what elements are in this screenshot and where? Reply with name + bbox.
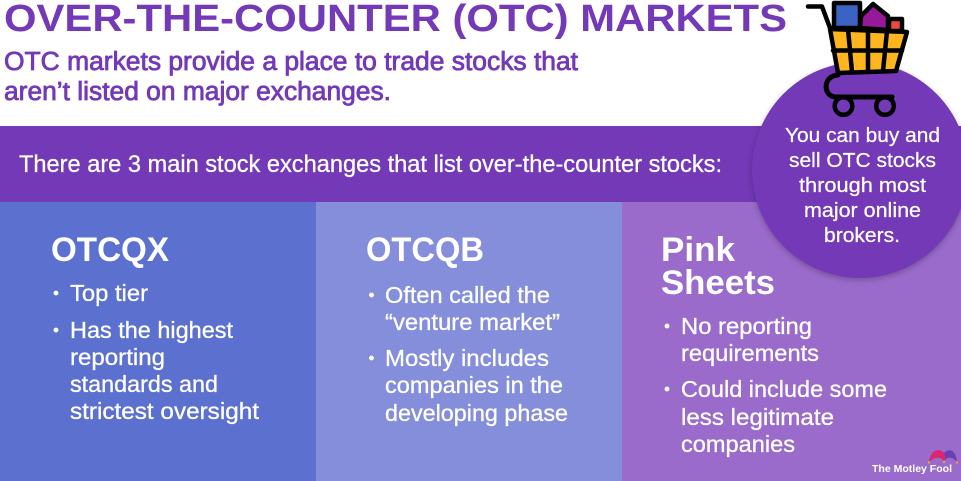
callout circle: You can buy and [785, 125, 940, 147]
banner [0, 126, 961, 202]
heading: Pink Sheets [661, 231, 775, 302]
heading: OTCQB: OTCQB [366, 231, 484, 269]
panel: OTCQX [0, 202, 316, 481]
heading: OTCQX: OTCQX [51, 231, 169, 269]
bullets: OTCQB: developing phase [385, 400, 568, 426]
bullets: OTCQB [369, 282, 568, 426]
bullets: OTCQX: Top tier [70, 280, 148, 306]
cart goods [834, 3, 902, 31]
bullets: OTCQX: strictest oversight [70, 398, 260, 424]
logo: The Motley Fool: The Motley Fool [872, 463, 952, 475]
bullets: OTCQX: reporting [70, 344, 165, 370]
logo: The Motley Fool [872, 450, 958, 475]
bullets: Pink Sheets: less legitimate [681, 404, 834, 430]
bullets: OTCQB: Often called the [385, 282, 550, 308]
callout circle: sell OTC stocks [789, 150, 936, 172]
bullets: Pink Sheets: No reporting [681, 313, 812, 339]
bullets: Pink Sheets [665, 313, 887, 457]
callout circle: brokers. [824, 225, 900, 247]
subtitle [4, 48, 578, 106]
callout circle: through most [799, 175, 926, 197]
banner: There are 3 main stock exchanges that list over-the-counter stocks: [19, 151, 722, 178]
callout circle: major online [804, 200, 921, 222]
bullets: OTCQX [54, 280, 260, 424]
bullets: OTCQX: Has the highest [70, 317, 234, 343]
panel: Pink Sheets [622, 202, 961, 481]
heading: Pink Sheets: Sheets [661, 264, 775, 302]
bullets: OTCQB: “venture market” [385, 309, 560, 335]
subtitle: OTC markets provide a place to trade stocks that [4, 48, 578, 76]
bullets: OTCQX: standards and [70, 371, 218, 397]
icon: shopping cart [808, 3, 907, 115]
callout circle [752, 62, 961, 280]
bullets: Pink Sheets: Could include some [681, 376, 887, 402]
subtitle: aren’t listed on major exchanges. [4, 78, 391, 106]
panel: OTCQB [316, 202, 622, 481]
bullets: OTCQB: companies in the [385, 372, 563, 398]
bullets: Pink Sheets: requirements [681, 340, 819, 366]
bullets: OTCQB: Mostly includes [385, 345, 549, 371]
bullets: Pink Sheets: companies [681, 431, 795, 457]
heading: Pink Sheets: Pink [661, 231, 735, 269]
